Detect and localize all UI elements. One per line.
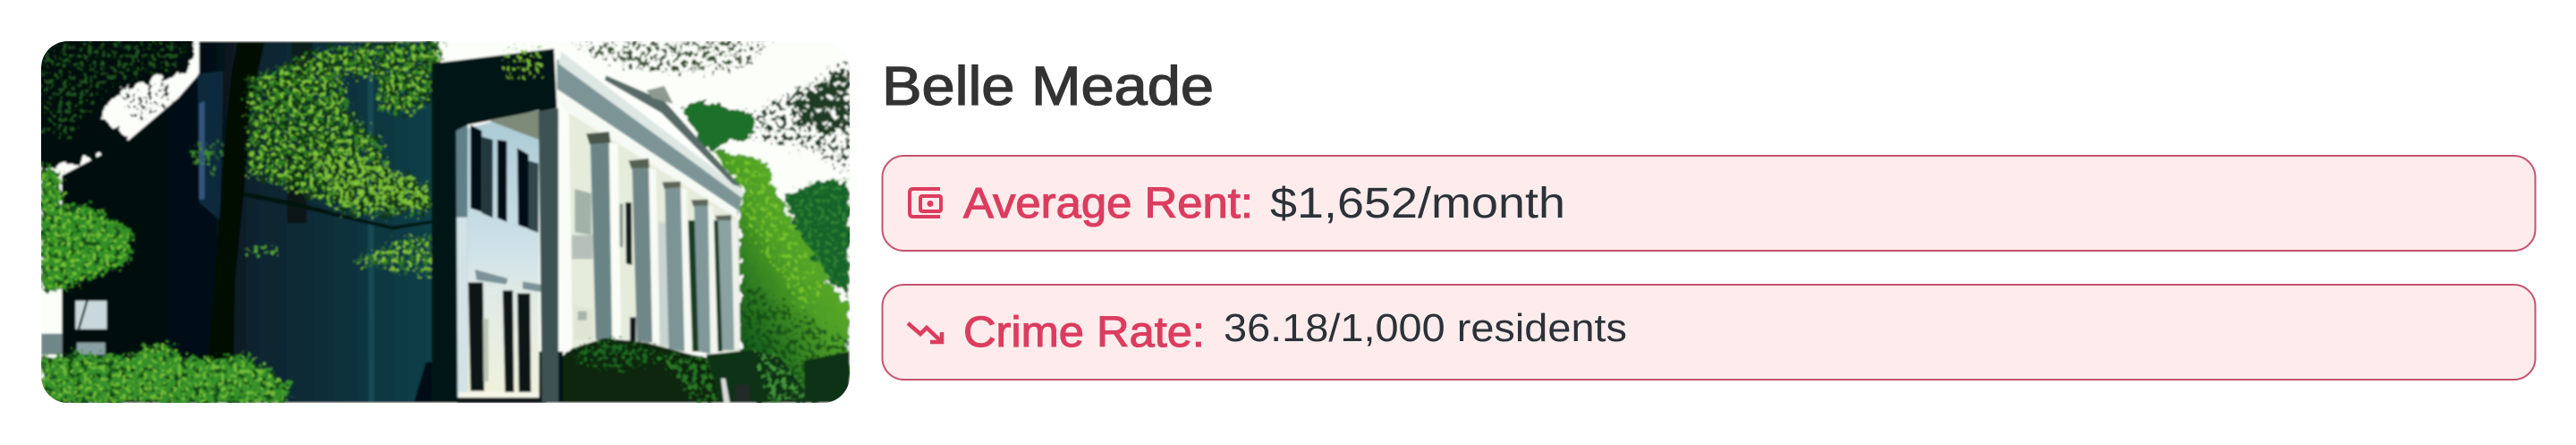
title: Belle Meade — [882, 56, 1214, 116]
label: average rent: Average Rent: — [963, 180, 1253, 227]
sky — [38, 39, 855, 408]
dark foliage top left — [41, 41, 197, 171]
porch interior — [569, 113, 741, 352]
panel: crime rate — [882, 285, 2535, 380]
entablature and pediment — [557, 52, 745, 218]
white front wall — [457, 110, 539, 397]
bush bottom left — [41, 343, 289, 403]
urn — [721, 379, 730, 403]
wall corner strip — [456, 124, 468, 398]
windows and shutters — [457, 124, 547, 404]
green foliage left — [41, 164, 132, 289]
porch dark gable — [432, 48, 557, 403]
background tree, dark top right — [575, 41, 850, 173]
icon: trending down arrow — [908, 323, 942, 342]
vine leaves on gable — [506, 47, 542, 77]
tree trunk — [208, 41, 265, 361]
bushes in front of porch — [563, 338, 804, 403]
side wall of house — [62, 41, 435, 403]
photo: Belle Meade mansion — [30, 30, 855, 408]
branches — [244, 192, 432, 230]
balcony, door and shutters on the porch — [572, 189, 636, 341]
icon: wallet — [910, 189, 941, 217]
wall corner and drainpipe — [198, 41, 435, 403]
column base shadow — [538, 350, 571, 403]
label: crime rate: Crime Rate: — [963, 309, 1205, 356]
panel: average rent — [882, 156, 2535, 251]
sky gaps at left — [41, 301, 106, 355]
value: crime rate: 36.18/1,000 residents — [1224, 306, 1627, 350]
sunlit tree foliage — [191, 41, 442, 274]
background tree, green right — [712, 149, 850, 403]
value: average rent: $1,652/month — [1270, 180, 1565, 227]
columns — [538, 107, 741, 403]
